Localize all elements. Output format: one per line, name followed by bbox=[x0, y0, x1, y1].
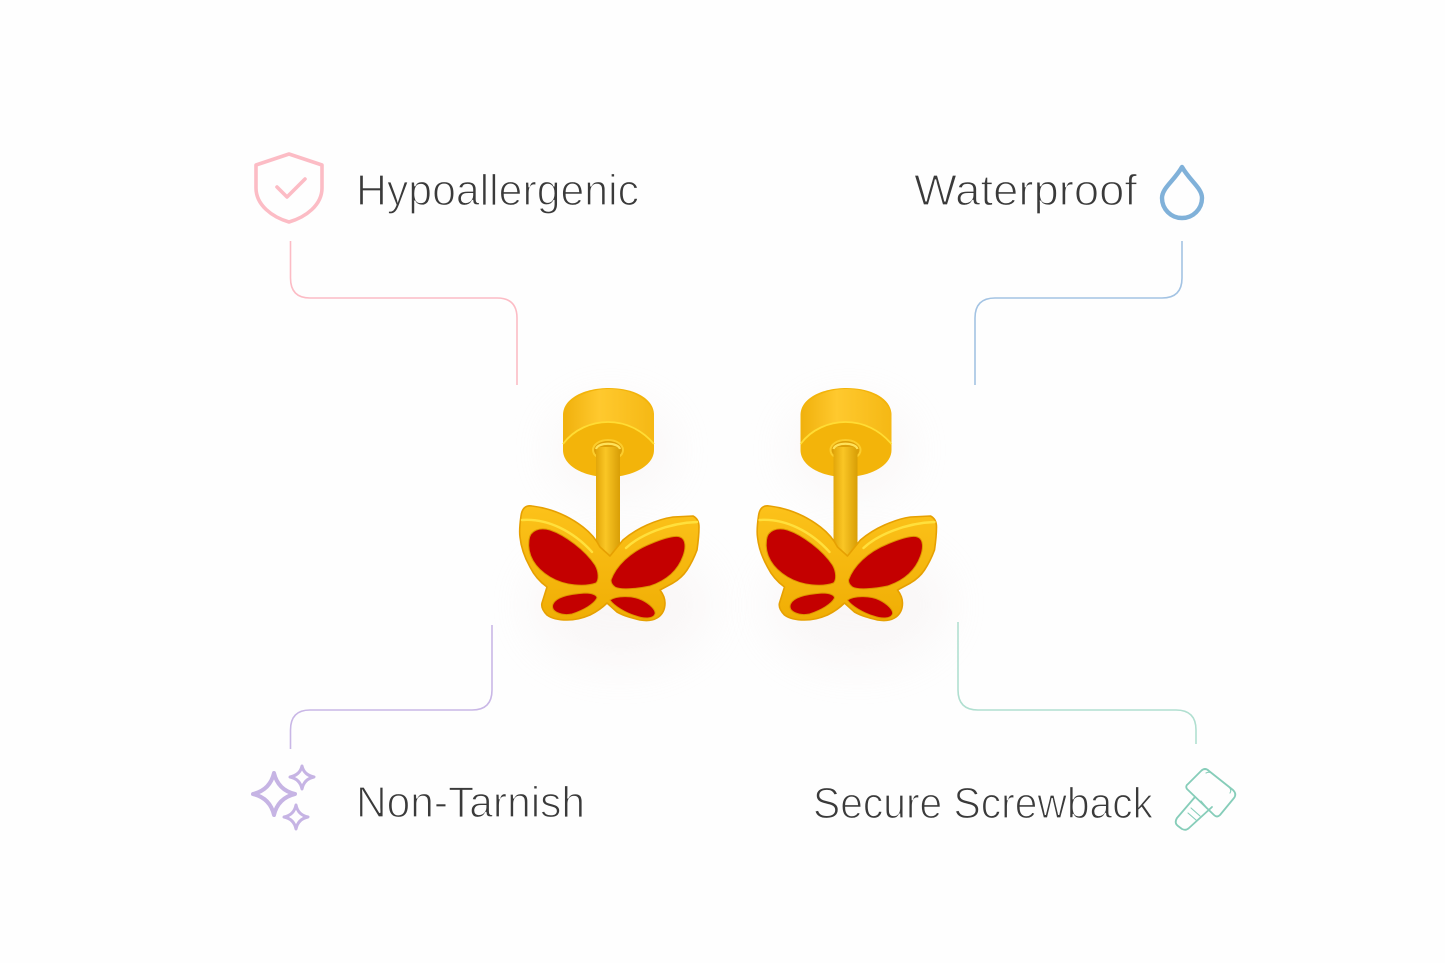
icon: sparkles bbox=[253, 766, 314, 829]
icon: screw bbox=[1176, 769, 1235, 830]
right earring bbox=[757, 388, 948, 665]
label: waterproof: Waterproof bbox=[914, 166, 1138, 215]
connector: secure screwback bbox=[958, 622, 1196, 744]
connector: waterproof bbox=[975, 241, 1182, 385]
label: secure screwback: Secure Screwback bbox=[813, 779, 1154, 828]
label: non-tarnish: Non-Tarnish bbox=[356, 778, 585, 827]
left earring bbox=[520, 388, 710, 665]
connector: non-tarnish bbox=[290, 625, 492, 749]
icon: water drop bbox=[1162, 167, 1202, 218]
connector: hypoallergenic bbox=[290, 241, 517, 385]
label: hypoallergenic: Hypoallergenic bbox=[356, 166, 639, 215]
icon: shield with check bbox=[256, 154, 322, 222]
